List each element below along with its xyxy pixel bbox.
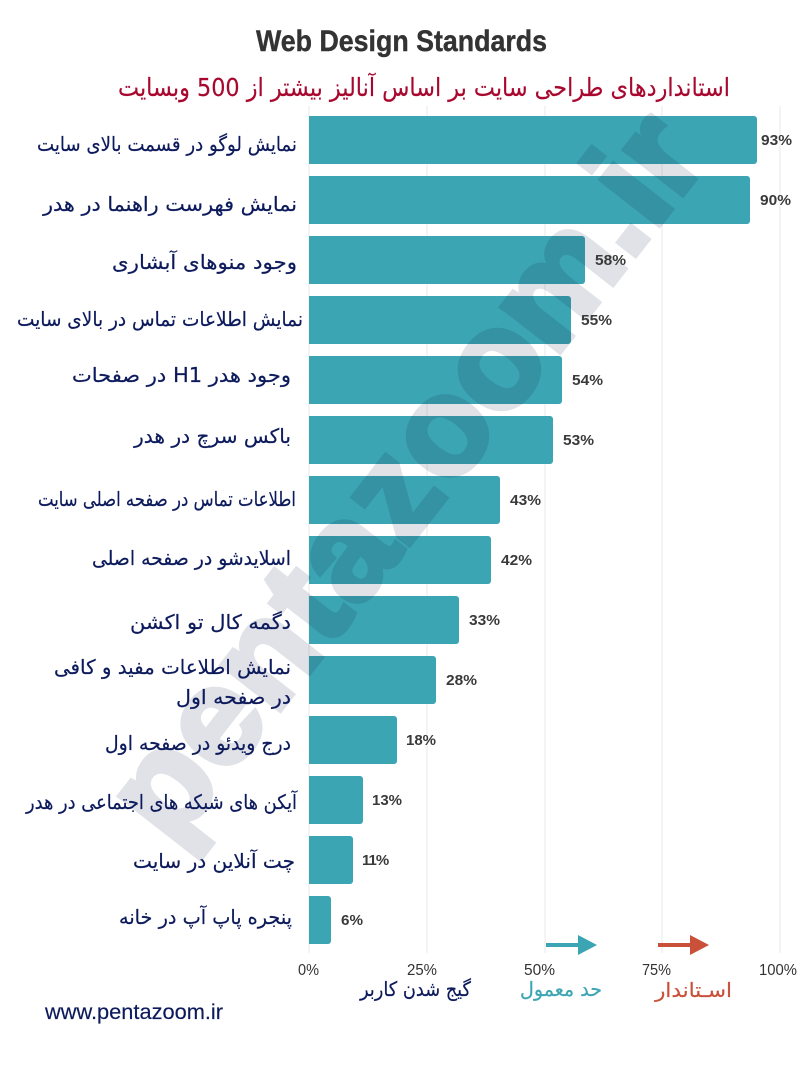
value 43%: 43%: [510, 492, 541, 509]
value 18%: 18%: [406, 732, 436, 749]
value 58%: 58%: [595, 252, 626, 269]
value 53%: 53%: [563, 432, 594, 449]
value 90%: 90%: [760, 192, 791, 209]
value 13%: 13%: [372, 792, 402, 809]
label 5: وجود هدر H1 در صفحات: [72, 363, 291, 387]
value 42%: 42%: [501, 552, 532, 569]
label 11: درج ویدئو در صفحه اول: [105, 731, 291, 755]
bar: 54%: [309, 356, 562, 404]
value 93%: 93%: [761, 132, 792, 149]
label 2: نمایش فهرست راهنما در هدر: [42, 192, 297, 216]
label 14: پنجره پاپ آپ در خانه: [119, 904, 292, 930]
label 10: در صفحه اول: [176, 685, 291, 709]
watermark: pentazoom.ir: [74, 83, 734, 866]
label 10: نمایش اطلاعات مفید و کافی: [54, 655, 291, 679]
value 28%: 28%: [446, 672, 477, 689]
tick 0%: 0%: [298, 962, 319, 979]
title: Web Design Standards: [256, 25, 547, 58]
value 54%: 54%: [572, 372, 603, 389]
tick 75%: 75%: [642, 962, 671, 979]
website url: www.pentazoom.ir: [44, 1001, 223, 1024]
label 8: اسلایدشو در صفحه اصلی: [92, 546, 291, 570]
value 6%: 6%: [341, 912, 363, 929]
label 3: وجود منوهای آبشاری: [112, 249, 297, 274]
label 12: آیکن های شبکه های اجتماعی در هدر: [25, 789, 298, 814]
bar chart: [309, 116, 757, 944]
label 4: نمایش اطلاعات تماس در بالای سایت: [17, 307, 303, 331]
bar: 6%: [309, 896, 331, 944]
label 1: نمایش لوگو در قسمت بالای سایت: [37, 132, 297, 156]
bar: 42%: [309, 536, 491, 584]
label 7: اطلاعات تماس در صفحه اصلی سایت: [38, 487, 296, 511]
bar: 53%: [309, 416, 553, 464]
subtitle: استانداردهای طراحی سایت بر اساس آنالیز بیشتر از 500 وبسایت: [118, 72, 730, 103]
value 33%: 33%: [469, 612, 500, 629]
bar: 58%: [309, 236, 585, 284]
tick 50%: 50%: [524, 962, 555, 979]
label 9: دگمه کال تو اکشن: [130, 610, 291, 634]
arrow: standard: [658, 935, 709, 955]
legend: user confusion: گیج شدن کاربر: [359, 977, 471, 1001]
value 55%: 55%: [581, 312, 612, 329]
tick 25%: 25%: [407, 962, 437, 979]
label 13: چت آنلاین در سایت: [133, 848, 295, 873]
value 11%: 11%: [362, 852, 389, 869]
bar: 18%: [309, 716, 397, 764]
label 10: [54, 655, 291, 709]
bar: 28%: [309, 656, 436, 704]
legend: standard: اسـتاندار: [654, 978, 732, 1002]
bar: 90%: [309, 176, 750, 224]
legend: typical: حد معمول: [520, 977, 602, 1001]
bar: 11%: [309, 836, 353, 884]
tick 100%: 100%: [759, 962, 797, 979]
bar: 93%: [309, 116, 757, 164]
x axis labels: [298, 962, 797, 979]
row labels: [17, 132, 303, 930]
bar: 33%: [309, 596, 459, 644]
label 6: باکس سرچ در هدر: [133, 424, 291, 449]
bar: 13%: [309, 776, 363, 824]
arrow: typical: [546, 935, 597, 955]
bar: 43%: [309, 476, 500, 524]
bar: 55%: [309, 296, 571, 344]
value labels: [341, 132, 792, 929]
